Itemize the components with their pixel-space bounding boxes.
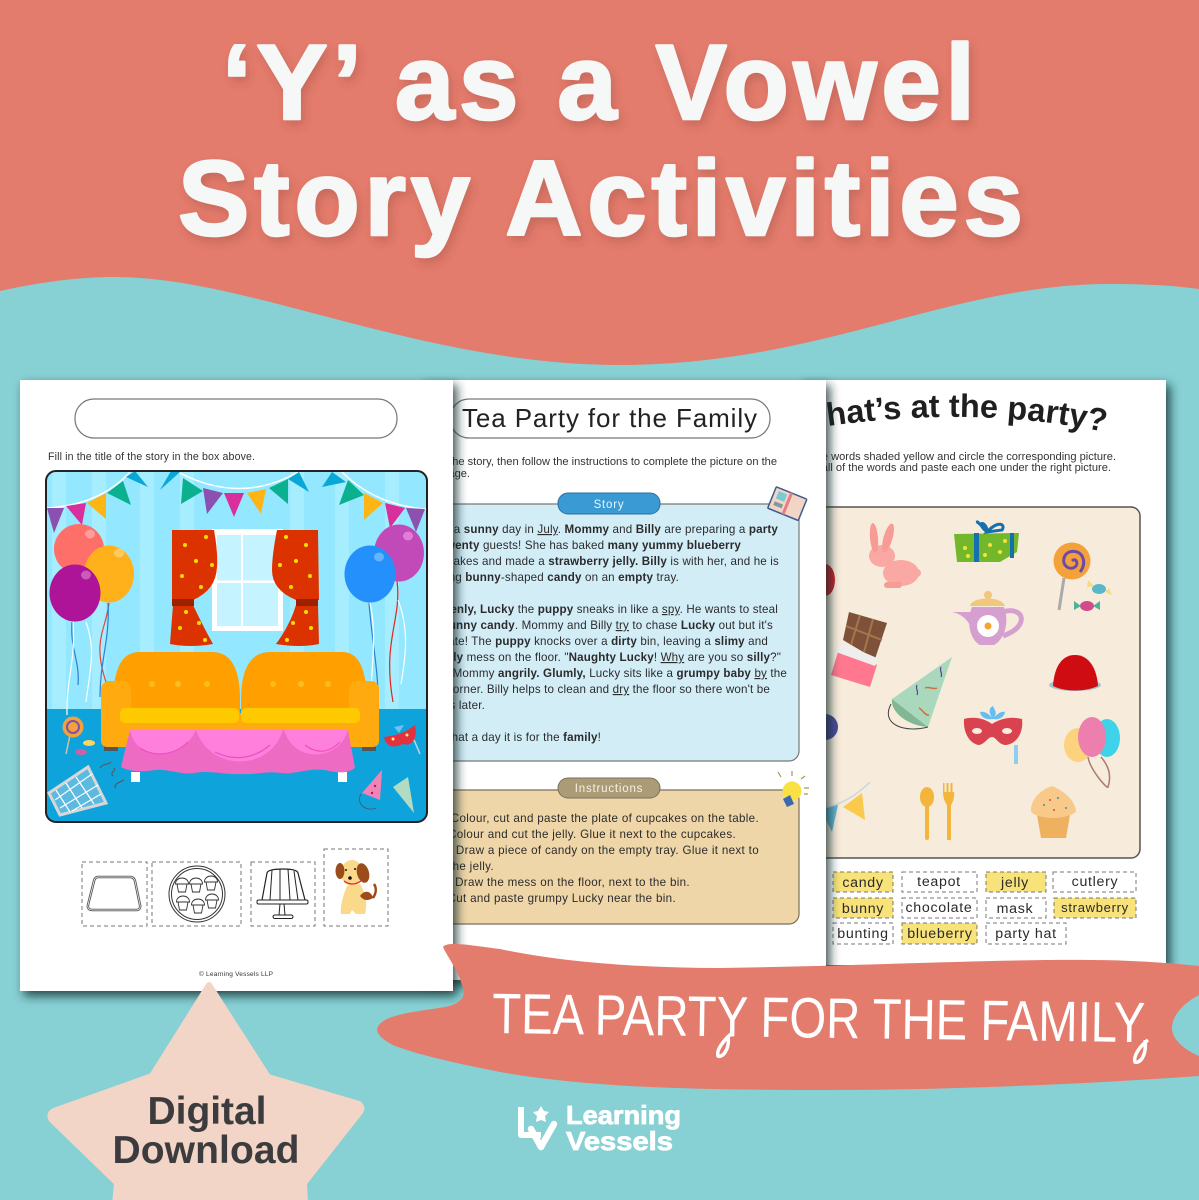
icon: jelly [1049,655,1101,691]
blank title box [75,399,397,438]
icon: chocolate [831,612,887,687]
story pill: Story [594,499,624,511]
story text [417,523,787,744]
title: Story Activities [178,138,1023,258]
title: ‘Y’ as a Vowel [222,22,975,142]
icon: teapot [950,591,1021,645]
word cards: party hat [995,926,1057,942]
story text: smelly mess on the floor. "Naughty Lucky! Why are you so silly?" [426,651,781,664]
icon: lollipop [1054,542,1112,611]
badge text: Digital [148,1090,266,1133]
ribbon banner [377,944,1199,1090]
window [212,529,283,631]
bunting [47,471,426,533]
icon: cutlery [920,783,954,840]
icon: strawberry [815,564,835,596]
curtains [170,530,319,646]
fill in directions: Fill in the title of the story in the box above. [48,451,255,463]
party room scene [46,471,427,822]
instructions text: 2. Colour and cut the jelly. Glue it next to the cupcakes. [434,828,736,841]
digital download star badge [50,985,361,1200]
balloons [50,524,424,715]
page 3 instructions: Cut all of the words and paste each one under the right picture. [801,462,1111,474]
story text: placing bunny-shaped candy on an empty tray. [424,571,679,584]
icon: gift [954,522,1019,562]
story text: Suddenly, Lucky the puppy sneaks in like a spy. He wants to steal [421,603,778,616]
story directions: Read the story, then follow the instructions to complete the picture on the [420,456,777,468]
carnival mask [384,725,420,754]
coral wave header [0,0,1199,365]
waste bin [49,762,124,815]
story title box: Tea Party for the Family [462,403,757,433]
jelly stand cutout [251,862,315,926]
icon: book [768,487,807,520]
party hats [359,770,414,813]
badge text [112,1090,300,1172]
icon: blueberry [812,714,838,740]
dog cutout [324,849,388,926]
story pill [558,493,660,514]
icon: bunting pieces [820,782,870,832]
badge text: Download [112,1129,300,1172]
word cards: bunting [837,926,889,942]
story directions [418,456,777,480]
story text: asks Mommy angrily. Glumly, Lucky sits like a grumpy baby by the [425,667,787,680]
panel: instructions [420,771,809,924]
icon: party balloons [1064,717,1120,787]
page 3 instructions: Read the words shaded yellow and circle the corresponding picture. [783,451,1116,463]
page 3 heading: What’s at the party? [827,393,1106,433]
story text: What a day it is for the family! [441,731,601,744]
cupcake plate cutout [152,862,241,926]
instructions pill [558,778,660,798]
banner descenders [718,1034,1148,1062]
brand logo [521,1100,681,1156]
word cards: candy [842,875,884,891]
word cards: mask [997,901,1034,917]
sofa [101,652,379,751]
icon: bunny [869,522,921,588]
logo text [566,1100,681,1156]
story text: It is a sunny day in July. Mommy and Billy are preparing a party [432,523,778,536]
word cards: chocolate [905,900,973,916]
logo mark [521,1106,554,1147]
instructions text: 1. Colour, cut and paste the plate of cupcakes on the table. [437,812,759,825]
story text: for twenty guests! She has baked many yummy blueberry [424,539,741,552]
word cards: bunny [842,901,884,917]
icon: green party hat [888,657,952,729]
tray cutout [82,862,147,926]
word cards: jelly [1000,875,1029,891]
icon: cupcake [1031,786,1076,838]
page 3: what's at the party [783,377,1178,966]
copyright: © Learning Vessels LLP [199,970,273,978]
logo text: Learning [566,1100,681,1130]
icon: mask [964,706,1022,764]
story text: too late! The puppy knocks over a dirty bin, leaving a slimy and [425,635,768,648]
word cards: cutlery [1072,874,1119,890]
story text: cupcakes and made a strawberry jelly. Billy is with her, and he is [428,555,779,568]
instructions text: 4. Draw the mess on the floor, next to the bin. [441,876,690,889]
story directions: next page. [418,468,470,480]
icon: light bulb [778,771,809,807]
word cards: teapot [917,874,961,890]
instructions text: 3. Draw a piece of candy on the empty tray. Glue it next to [442,844,759,857]
page 1: picture [20,380,453,991]
instructions text: 5. Cut and paste grumpy Lucky near the bin. [434,892,676,905]
story text: the bunny candy. Mommy and Billy try to chase Lucky out but it's [422,619,773,632]
page 3 instructions [783,451,1116,474]
floor props: lollipop and candy [62,716,95,755]
story text: a mess later. [417,699,485,712]
word cards: blueberry [907,926,973,942]
word cards: strawberry [1061,900,1129,915]
instructions pill: Instructions [575,783,643,795]
cutouts [82,849,388,926]
picture panel [790,507,1140,858]
panel: story [417,487,807,761]
title [178,22,1023,258]
instructions text: the jelly. [449,860,494,873]
word cards [833,872,1136,944]
instructions text [434,812,759,905]
page 2: story [417,380,826,980]
page 3 heading [827,393,1106,433]
story text: corner. Billy helps to clean and dry the floor so there won't be [447,683,770,696]
logo text: Vessels [566,1126,673,1156]
table with pink cloth [121,730,355,782]
scene border [46,471,427,822]
